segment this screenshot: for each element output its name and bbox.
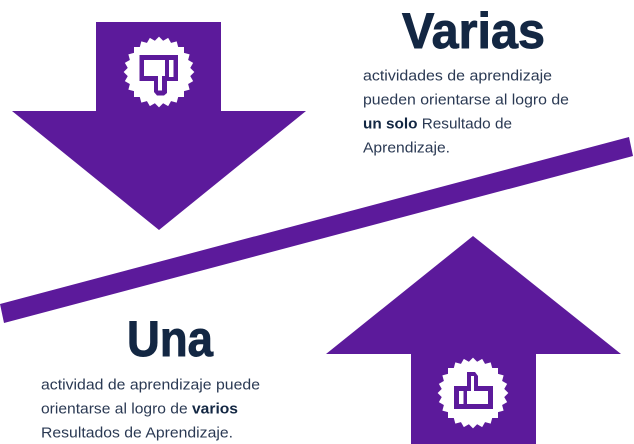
text block: Una description: Resultados de Aprendizaje.	[41, 424, 233, 442]
heading: Una: Una	[127, 311, 214, 367]
text block: Varias description: actividades de aprendizaje	[363, 68, 552, 84]
arrow: purple up arrow	[326, 236, 621, 444]
text block: Una description: actividad de aprendizaje puede	[41, 376, 260, 394]
text block: Varias description: un solo Resultado de	[363, 116, 512, 132]
text block: Una description: orientarse al logro de varios	[41, 400, 238, 418]
text block: Varias description: Aprendizaje.	[363, 140, 450, 156]
icon: thumbs down badge	[124, 37, 194, 107]
text block: Varias description	[363, 68, 569, 156]
text block: Varias description: pueden orientarse al logro de	[363, 92, 569, 108]
heading: Varias: Varias	[402, 3, 545, 59]
diagonal divider bar	[0, 137, 633, 323]
icon: thumbs up badge	[438, 358, 508, 428]
arrow: purple down arrow	[12, 22, 306, 230]
text block: Una description	[41, 376, 260, 442]
